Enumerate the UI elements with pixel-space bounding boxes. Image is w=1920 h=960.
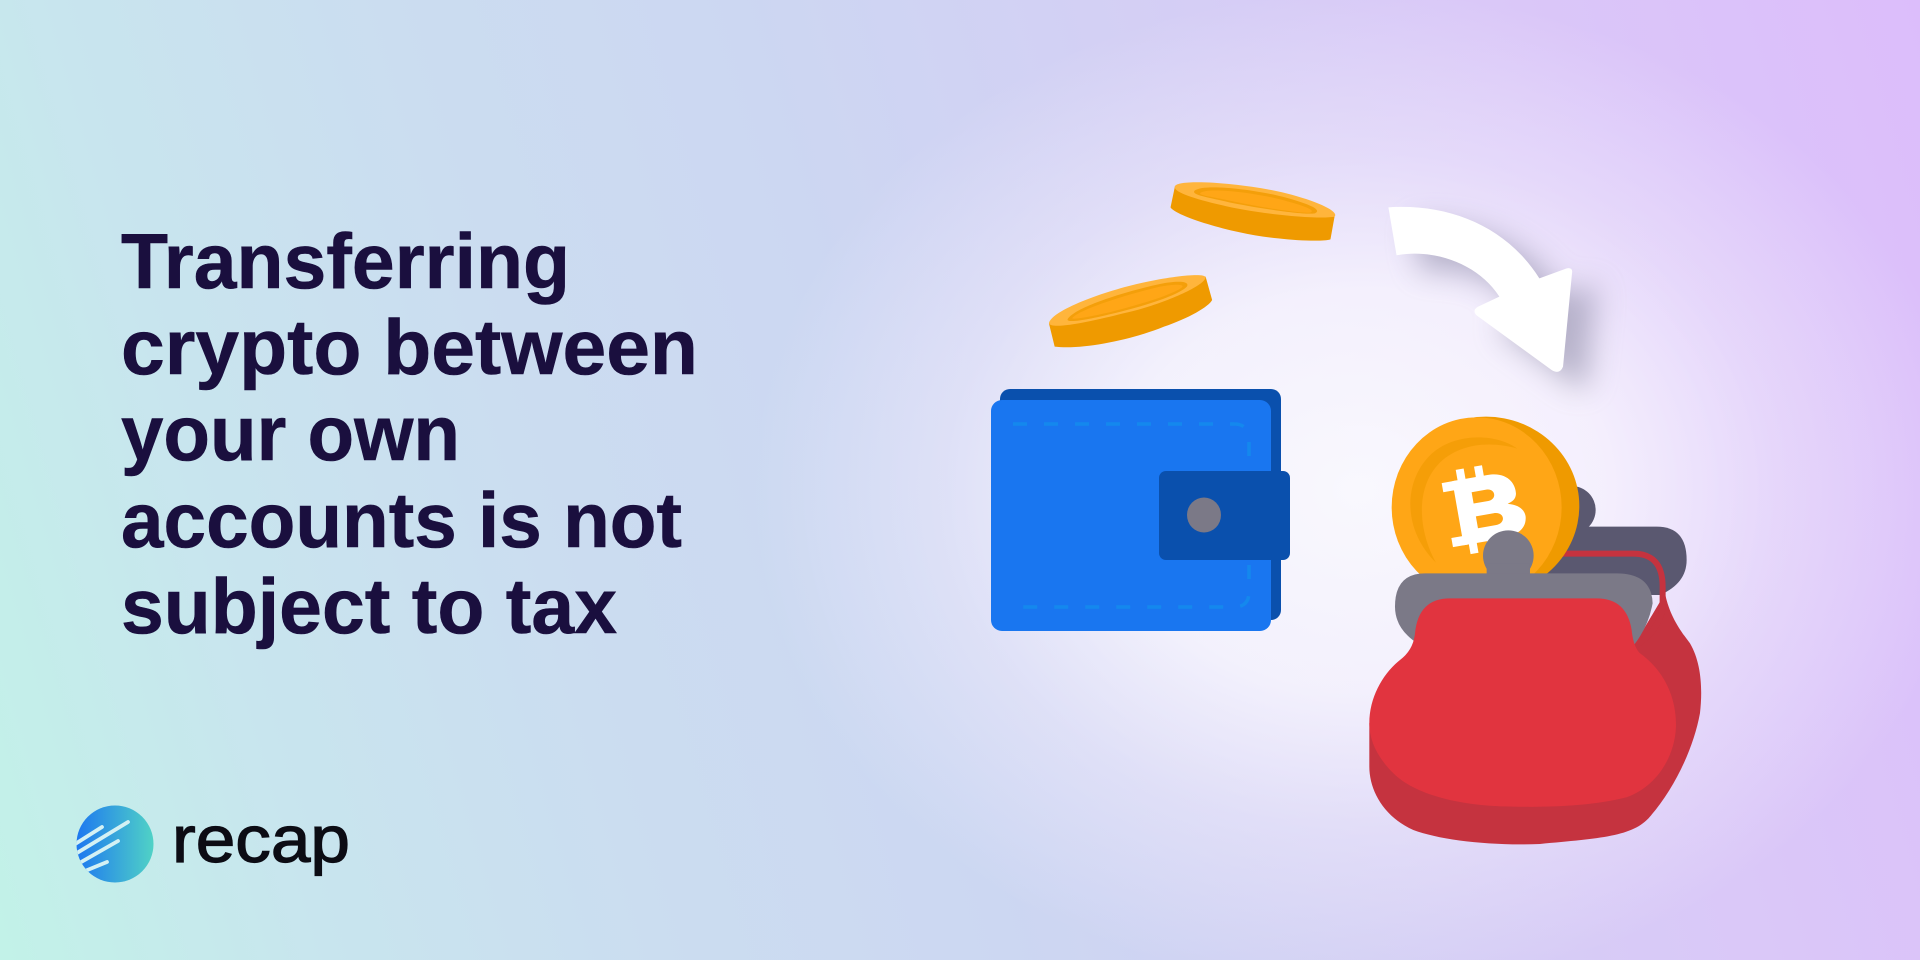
title: your own [121, 389, 460, 477]
title: crypto between [121, 303, 698, 391]
purse clasp frame [1395, 530, 1653, 645]
title [121, 217, 698, 650]
title: subject to tax [121, 562, 617, 650]
icon: lower coin [1049, 275, 1212, 347]
logo icon [72, 806, 154, 882]
icon: blue wallet [991, 389, 1290, 631]
purse back frame [1540, 486, 1687, 595]
logo wordmark: recap [172, 802, 350, 876]
icon: falling coins [1049, 182, 1335, 347]
purse back strap [1557, 554, 1663, 646]
purse back body [1369, 593, 1701, 844]
icon: red coin purse with bitcoin [1369, 417, 1701, 844]
arrow [1388, 207, 1597, 389]
bitcoin symbol [1440, 459, 1530, 557]
title: accounts is not [121, 476, 682, 564]
logo: recap [72, 802, 350, 882]
bitcoin coin [1392, 417, 1579, 597]
title: Transferring [121, 217, 570, 305]
icon: top coin [1171, 182, 1335, 241]
purse front body [1369, 598, 1676, 807]
